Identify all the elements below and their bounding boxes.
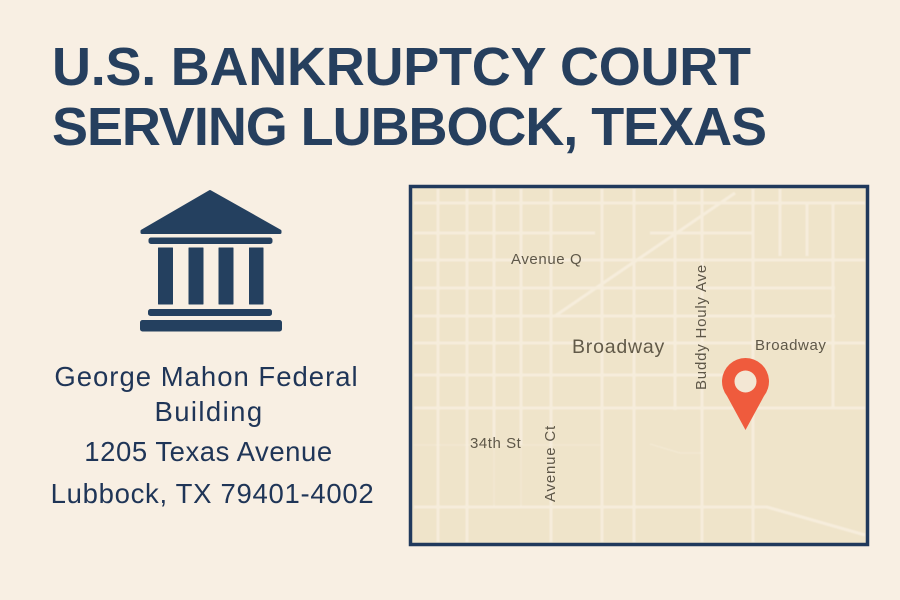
address block [51,361,374,509]
label: Broadway small: Broadway [755,337,827,354]
title: U.S. BANKRUPTCY COURT [52,37,751,97]
map streets [414,189,865,542]
street address: 1205 Texas Avenue [84,436,333,467]
title [52,37,766,157]
label: Avenue Ct: Avenue Ct [542,425,559,502]
title: SERVING LUBBOCK, TEXAS [52,97,766,157]
building name line 1: George Mahon Federal [54,361,359,392]
building name line 2: Building [154,396,264,427]
label: Buddy Houly Ave: Buddy Houly Ave [693,264,710,390]
label: 34th St: 34th St [470,435,522,452]
city state zip: Lubbock, TX 79401-4002 [51,478,374,509]
icon: courthouse [140,190,282,332]
label: Avenue Q: Avenue Q [511,251,582,268]
label: Broadway large: Broadway [572,336,665,358]
icon: location pin [722,358,769,430]
map border [410,186,868,544]
street labels [470,251,827,502]
